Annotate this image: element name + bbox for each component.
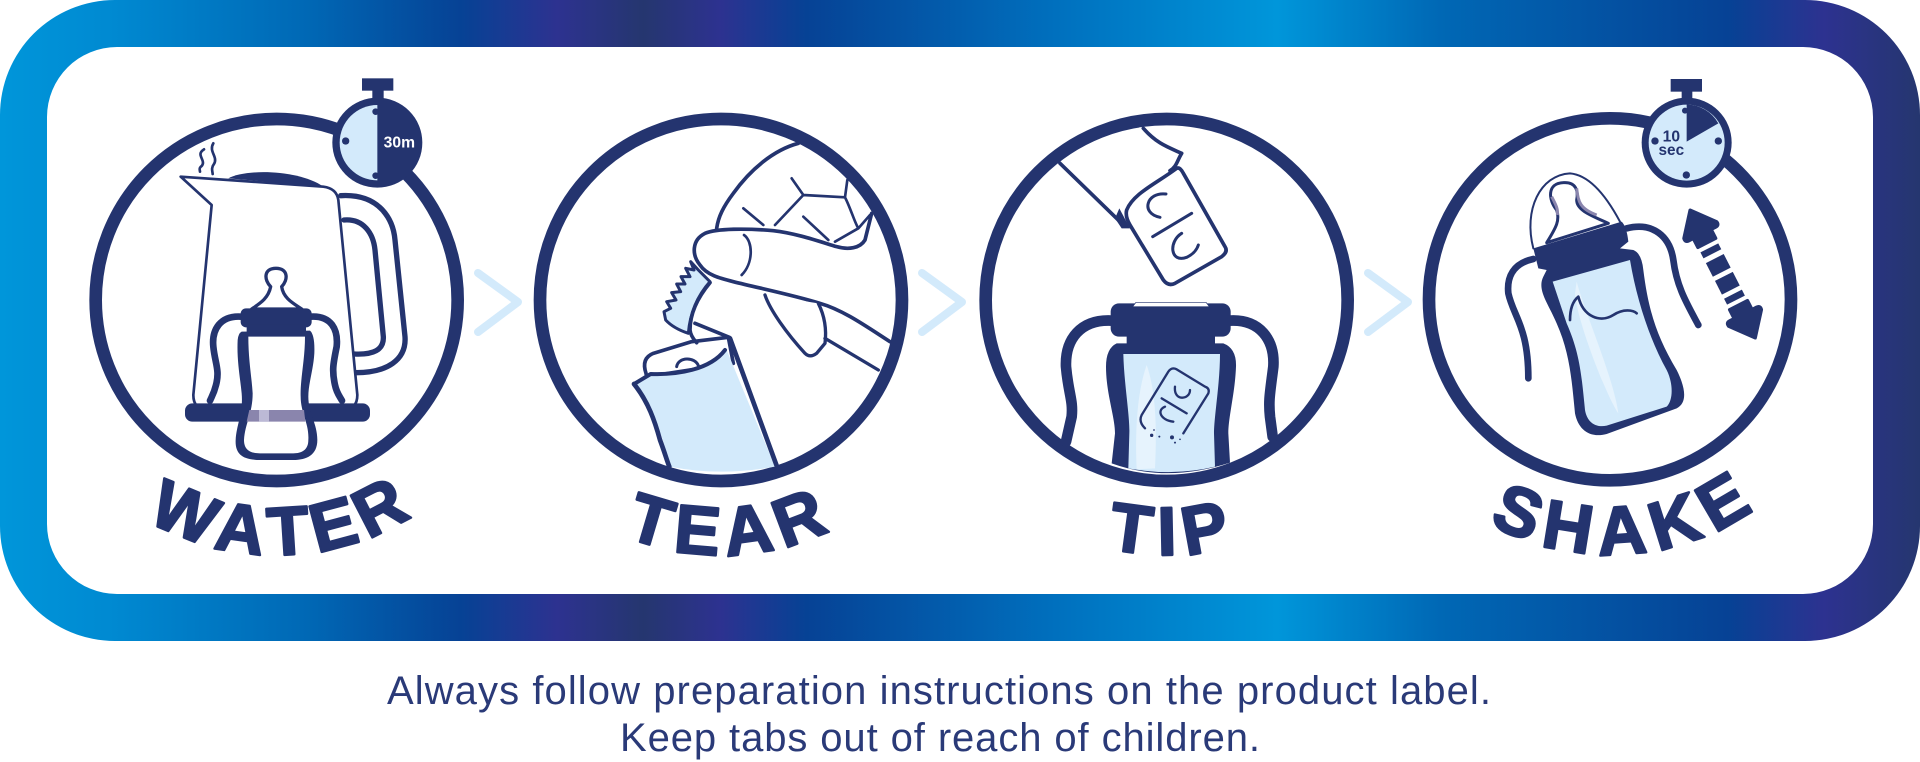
icon: kettle	[181, 143, 405, 422]
icon: dissolving tablet	[1141, 368, 1209, 444]
icon: 10 second stopwatch: 10	[1663, 129, 1680, 146]
label: TIP: TIP	[1112, 501, 1224, 556]
circle ring	[96, 119, 458, 481]
label: SHAKE: SHAKE	[1493, 470, 1754, 557]
icon: 30 minute stopwatch: 30m	[384, 134, 415, 151]
panel: tip	[979, 112, 1354, 556]
circle ring	[1429, 118, 1791, 480]
icon: open bottle	[1066, 302, 1273, 473]
panel: tear	[534, 112, 908, 558]
icon: 10 second stopwatch	[1642, 79, 1732, 188]
text block: preparation note	[387, 669, 1491, 760]
label: WATER: WATER	[156, 477, 412, 556]
circle ring	[986, 119, 1348, 481]
label: TEAR: TEAR	[636, 491, 830, 558]
icon: torn strip	[664, 262, 710, 333]
icon: sachet	[634, 337, 777, 472]
icon: double arrow	[1674, 202, 1772, 346]
arrow: chevron two	[922, 273, 962, 332]
icon: 30 minute stopwatch	[332, 78, 422, 188]
arrow: chevron one	[478, 273, 518, 332]
text block: preparation note: Keep tabs out of reach of children.	[620, 716, 1260, 760]
circle ring	[540, 119, 902, 481]
text block: preparation note: Always follow preparation instructions on the product label.	[387, 669, 1491, 713]
icon: 10 second stopwatch: sec	[1659, 142, 1685, 159]
panel: water	[89, 78, 464, 556]
icon: sachet and tablet	[1060, 128, 1226, 284]
panel: shake	[1422, 79, 1798, 557]
arrow: chevron three	[1368, 273, 1408, 332]
icon: bottle	[210, 268, 342, 460]
icon: hand	[690, 143, 890, 370]
icon: tilted bottle	[1508, 173, 1698, 435]
